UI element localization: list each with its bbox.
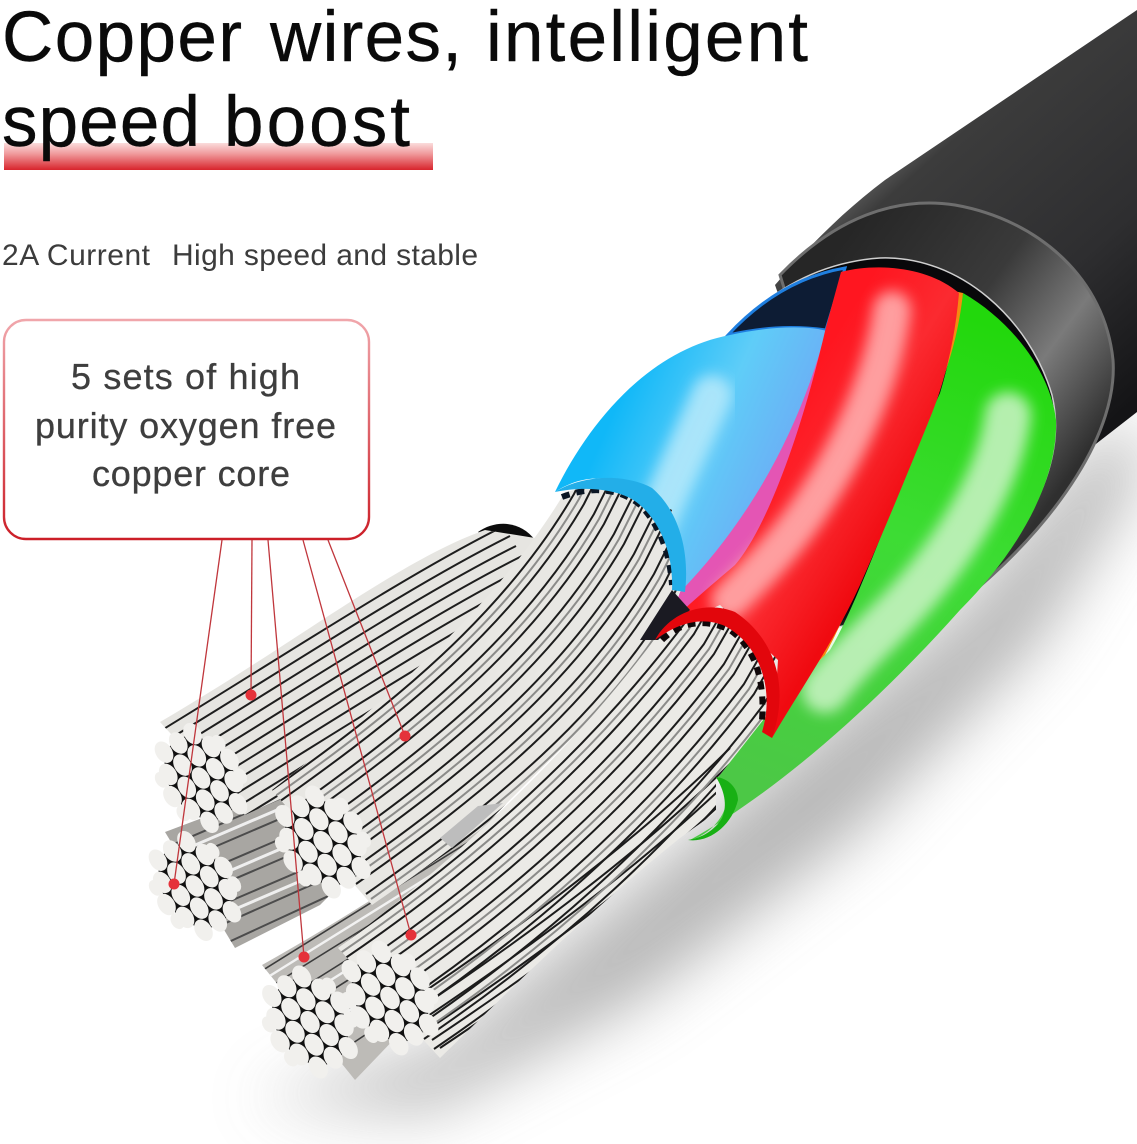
red wire strand shadows	[662, 623, 763, 720]
blue wire	[555, 327, 830, 590]
red wire end collar	[655, 607, 780, 738]
pointer 2	[246, 540, 256, 700]
black outer jacket	[775, 10, 1137, 598]
callout box: 5 sets of high	[71, 356, 300, 397]
subtitle	[2, 239, 478, 272]
strand cross-section 1	[137, 710, 265, 846]
cable drop shadow	[250, 420, 1137, 1110]
pink reflection	[668, 330, 830, 625]
strand cross-section 3	[256, 772, 390, 912]
blue wire end collar	[555, 478, 686, 592]
strand cross-section 4	[243, 952, 377, 1092]
jacket collar	[780, 203, 1113, 598]
gap between bundles 3 and 5	[440, 803, 503, 848]
red wire highlight	[730, 310, 892, 600]
pointer 1	[168, 540, 222, 890]
title: speed	[2, 83, 200, 162]
silver bundle 4	[262, 814, 498, 1080]
strand cross-section 2	[131, 818, 259, 954]
title: Copper	[2, 0, 242, 77]
pointer 3	[268, 540, 310, 962]
title: intelligent	[486, 0, 808, 77]
silver bundle 1	[160, 530, 534, 815]
silver bundle 5	[338, 605, 778, 1058]
title	[2, 0, 808, 162]
callout box	[4, 320, 369, 539]
subtitle: High speed and stable	[172, 239, 478, 272]
orange and yellow reflection	[800, 285, 963, 680]
blue wire highlight	[655, 395, 712, 525]
dark gap between blue and red collars	[640, 590, 690, 640]
subtitle: 2A Current	[2, 239, 151, 272]
strand cross-section 5	[323, 927, 457, 1069]
blue wire strand shadows	[562, 490, 672, 585]
jacket opening	[728, 258, 1055, 640]
title: boost	[224, 83, 410, 162]
silver bundle 3	[272, 488, 680, 905]
dark navy interior with blue rim	[728, 268, 845, 335]
dark gap at back of bundle 1	[478, 524, 535, 545]
highlight bar behind heading	[4, 143, 433, 170]
green wire highlight	[825, 415, 1008, 690]
red wire	[655, 267, 959, 738]
green wire end collar	[688, 777, 738, 840]
title: wires,	[269, 0, 462, 77]
pointer lines and dots	[168, 540, 416, 962]
green wire	[690, 293, 1056, 840]
silver bundle 2	[165, 799, 340, 948]
callout box: copper core	[92, 453, 290, 494]
callout box: purity oxygen free	[35, 405, 336, 446]
pointer 4	[303, 540, 416, 940]
pointer 5	[328, 540, 410, 742]
